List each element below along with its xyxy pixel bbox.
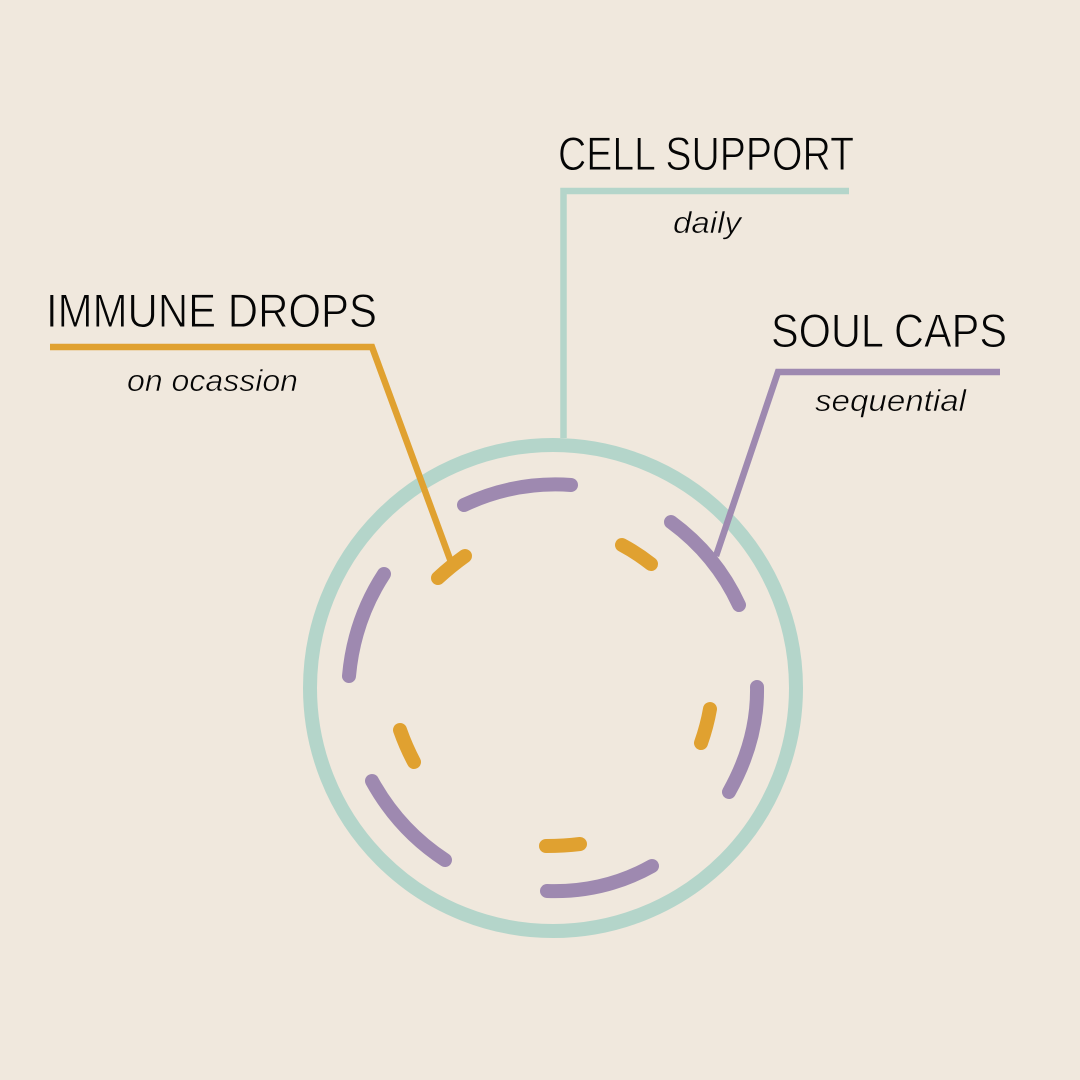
leader line bbox=[564, 191, 849, 438]
frequency: daily bbox=[673, 205, 744, 240]
purple arc segments bbox=[349, 484, 757, 891]
amber arc segments bbox=[400, 545, 710, 846]
leader line bbox=[50, 347, 451, 562]
diagram: ring with dashes bbox=[310, 445, 796, 931]
heading: CELL SUPPORT bbox=[558, 127, 854, 180]
heading: IMMUNE DROPS bbox=[46, 284, 377, 337]
heading: SOUL CAPS bbox=[771, 304, 1007, 357]
frequency: sequential bbox=[815, 383, 967, 418]
outer circle bbox=[310, 445, 796, 931]
callout: soul caps bbox=[716, 304, 1007, 556]
frequency: on ocassion bbox=[127, 363, 298, 398]
callout: cell support bbox=[558, 127, 854, 438]
callout: immune drops bbox=[46, 284, 451, 562]
leader line bbox=[716, 372, 1000, 556]
